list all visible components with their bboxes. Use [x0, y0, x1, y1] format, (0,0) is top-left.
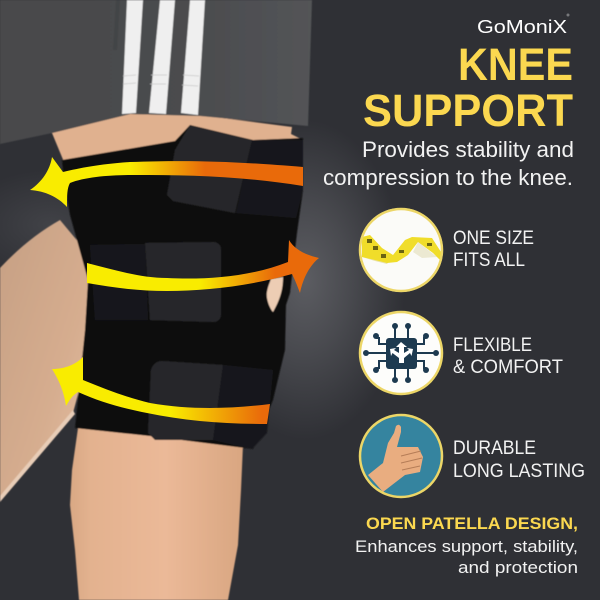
callout: open patella design [355, 514, 578, 577]
logo: GoMonix [477, 14, 570, 37]
middle strap [90, 242, 221, 322]
label: one size fits all: FITS ALL [453, 250, 525, 271]
logo: GoMonix: GoMoniX [477, 17, 567, 37]
title: KNEE SUPPORT [363, 39, 573, 136]
label: durable long lasting [453, 438, 585, 482]
patella opening [267, 277, 283, 312]
thigh [52, 114, 303, 165]
title: KNEE SUPPORT: KNEE [458, 39, 573, 90]
arrow: top compression [30, 157, 303, 207]
callout: open patella design: OPEN PATELLA DESIGN, [366, 514, 578, 533]
shorts [0, 0, 312, 144]
knee brace [62, 125, 303, 449]
label: one size fits all: ONE SIZE [453, 228, 534, 249]
icon: measuring tape [359, 208, 443, 292]
icon: thumbs up [360, 415, 442, 497]
lower leg [70, 428, 243, 600]
bottom strap [148, 361, 273, 449]
label: flexible and comfort: & COMFORT [453, 357, 563, 378]
label: durable long lasting: LONG LASTING [453, 461, 585, 482]
back leg [0, 220, 92, 502]
label: durable long lasting: DURABLE [453, 438, 536, 459]
arrow: bottom compression [52, 357, 270, 424]
subtitle [323, 137, 574, 190]
icon: circuit chip with arrows [360, 312, 442, 394]
subtitle: compression to the knee. [323, 165, 573, 190]
photo: leg wearing knee brace [0, 0, 312, 600]
callout: open patella design: Enhances support, stability, [355, 537, 578, 556]
top strap [167, 125, 303, 218]
subtitle: Provides stability and [362, 137, 574, 162]
arrow: middle compression [87, 240, 319, 293]
label: flexible and comfort [453, 335, 563, 378]
label: one size fits all [453, 228, 534, 271]
label: flexible and comfort: FLEXIBLE [453, 335, 532, 356]
callout: open patella design: and protection [458, 558, 578, 577]
title: KNEE SUPPORT: SUPPORT [363, 85, 573, 136]
